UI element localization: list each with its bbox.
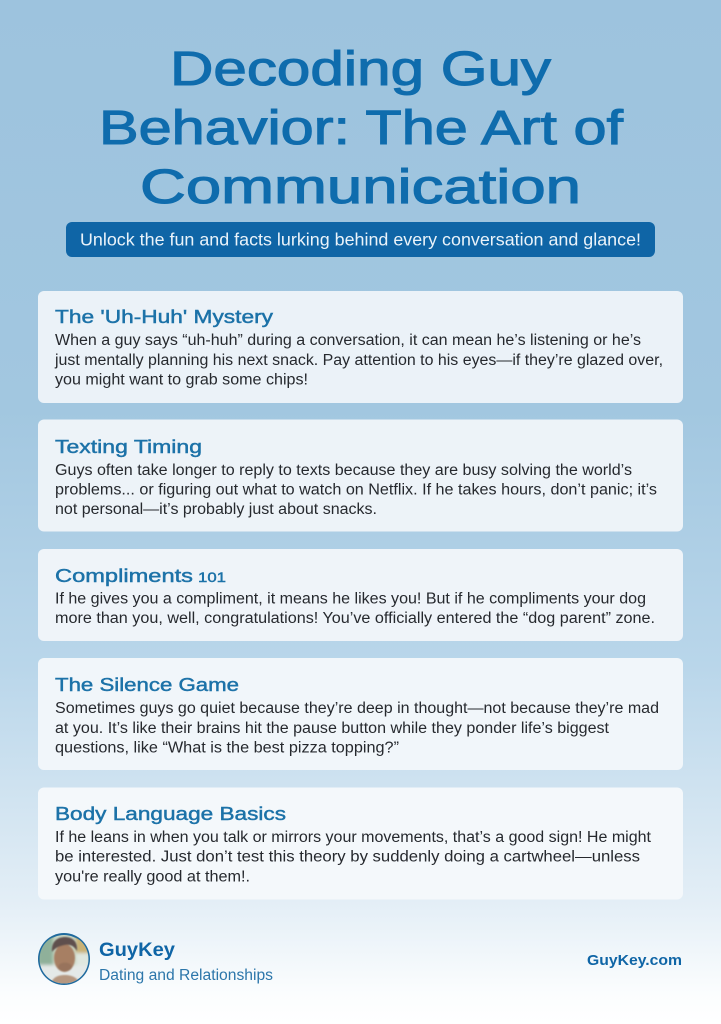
body text: Body Language [55,829,652,886]
footer logo avatar [38,933,90,987]
panel: The 'Uh-Huh' Mystery [38,291,683,403]
body text: Compliments [55,590,655,627]
body text: Compliments: If he gives you a compliment, it means he likes you! But if he compliments your dog [55,590,646,608]
footer tagline: Dating and Relationships [99,967,273,984]
body text: Silence: questions, like “What is the best pizza topping?” [55,740,399,756]
body text: Body Language: If he leans in when you talk or mirrors your movements, that’s a good sign! He might [55,829,652,846]
body text: Texting: Guys often take longer to reply to texts because they are busy solving the world’s [55,462,632,479]
body text: Texting: problems... or figuring out what to watch on Netflix. If he takes hours, don’t panic; it’s [55,482,657,498]
panel: Body Language Basics [38,788,683,900]
footer website: GuyKey.com [587,952,682,969]
heading: The Silence Game: The Silence Game [55,674,239,695]
title [99,42,624,214]
subtitle banner: Unlock the fun and facts lurking behind every conversation and glance! [80,230,641,250]
body text: Silence: at you. It’s like their brains hit the pause button while they ponder life’s biggest [55,720,610,737]
body text: Silence: Sometimes guys go quiet because they’re deep in thought—not because they’re mad [55,700,659,717]
body text: Compliments: more than you, well, congratulations! You’ve officially entered the “dog parent” zone. [55,610,655,627]
panel: Texting Timing [38,420,683,532]
title: Behavior: The Art of [99,101,624,155]
subtitle banner [66,222,655,257]
panel: Compliments 101 [38,549,683,641]
body text: Uh-Huh: you might want to grab some chips! [55,372,308,388]
heading: Body Language Basics: Body Language Basics [55,803,286,824]
panel: The Silence Game [38,658,683,770]
title: Communication [140,160,581,214]
body text: Body Language: you're really good at them!. [55,868,250,886]
title: Decoding Guy [170,42,552,96]
body text: Silence [55,700,659,756]
heading number: 101: 101 [198,569,226,585]
heading: Texting Timing: Texting Timing [55,436,202,457]
footer brand name: GuyKey [99,940,175,961]
heading: The 'Uh-Huh' Mystery: The 'Uh-Huh' Mystery [55,306,274,327]
body text: Uh-Huh [54,332,663,388]
body text: Body Language: be interested. Just don’t test this theory by suddenly doing a cartwheel—unless [55,848,640,866]
heading: Compliments: Compliments [55,565,193,586]
body text: Uh-Huh: When a guy says “uh-huh” during a conversation, it can mean he’s listening or he’s [55,332,641,349]
body text: Uh-Huh: just mentally planning his next snack. Pay attention to his eyes—if they’re glazed over, [54,352,663,369]
body text: Texting [55,462,657,518]
body text: Texting: not personal—it’s probably just about snacks. [55,501,377,518]
